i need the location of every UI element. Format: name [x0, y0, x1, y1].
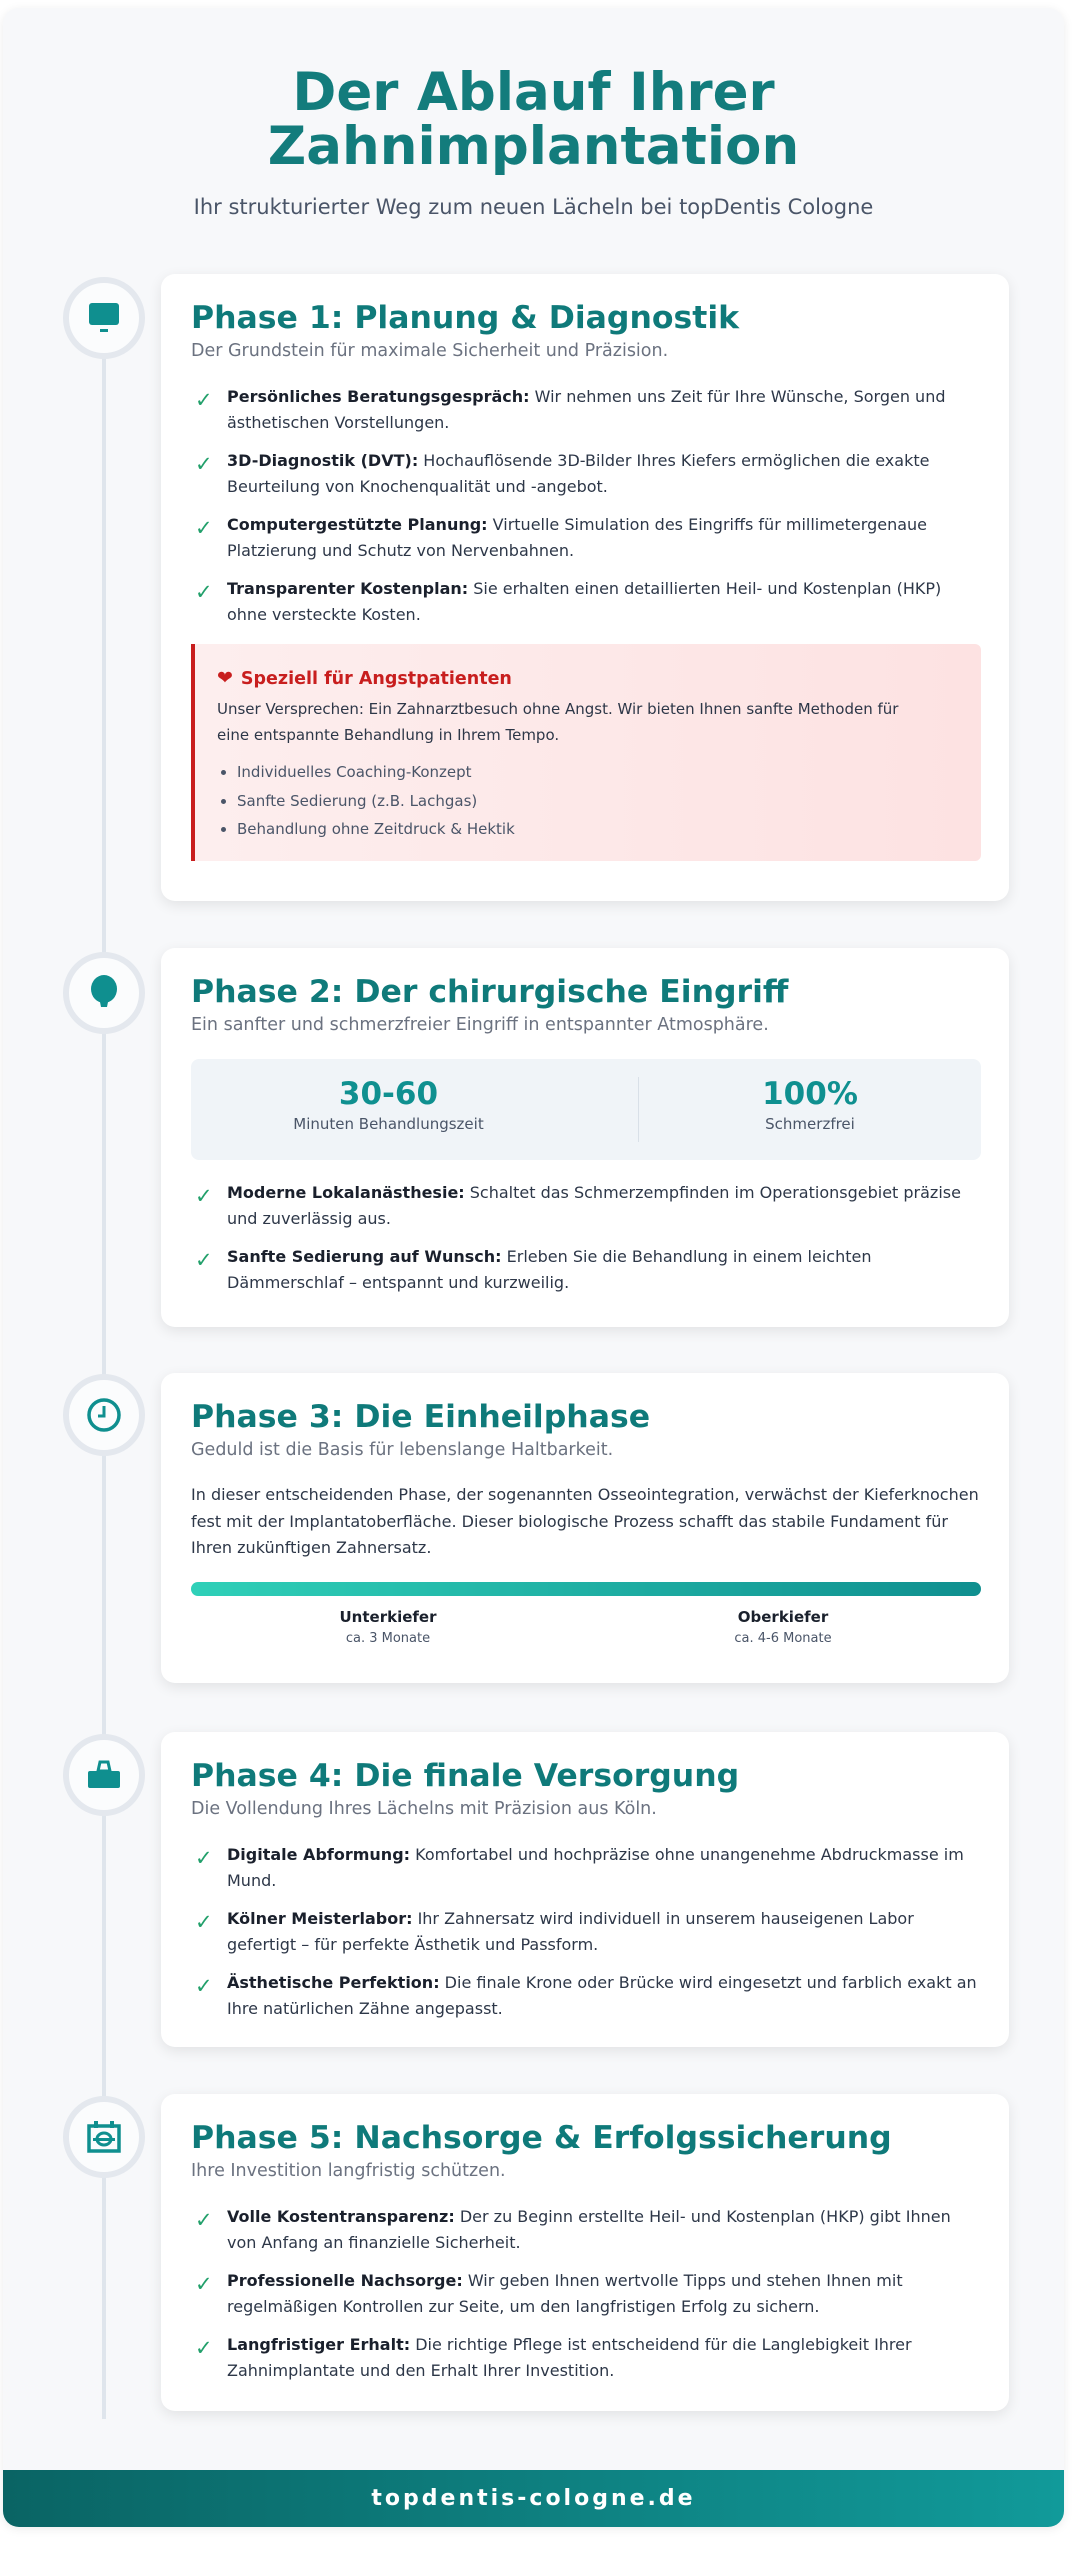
heading: Phase 2: Der chirurgische Eingriff: [191, 974, 788, 1010]
subheading: Die Vollendung Ihres Lächelns mit Präzision aus Köln.: [191, 1799, 657, 1819]
subheading: Ihre Investition langfristig schützen.: [191, 2161, 506, 2181]
subheading: Ein sanfter und schmerzfreier Eingriff in entspannter Atmosphäre.: [191, 1015, 769, 1035]
checklist: [198, 2207, 951, 2380]
callout text: eine entspannte Behandlung in Ihrem Tempo.: [217, 726, 559, 744]
icon: calendar (phase 5): [63, 2096, 145, 2178]
checklist: Digitale Abformung: Komfortabel und hochpräzise ohne unangenehme Abdruckmasse im Mund.: [227, 1845, 964, 1890]
icon: monitor (phase 1): [63, 277, 145, 359]
panel: phase 4: [161, 1732, 1009, 2047]
label: Oberkiefer: ca. 4-6 Monate: [734, 1630, 832, 1646]
checklist: Moderne Lokalanästhesie: Schaltet das Schmerzempfinden im Operationsgebiet präzise und zuverlässig aus.: [227, 1183, 961, 1228]
checklist: Volle Kostentransparenz: Der zu Beginn erstellte Heil- und Kostenplan (HKP) gibt Ihnen von Anfang an finanzielle Sicherheit.: [227, 2207, 951, 2252]
checklist: [198, 1183, 961, 1292]
footer: [3, 2470, 1064, 2527]
callout text: Unser Versprechen: Ein Zahnarztbesuch ohne Angst. Wir bieten Ihnen sanfte Methoden für: [217, 700, 898, 718]
footer: topdentis-cologne.de: [371, 2486, 696, 2511]
label: Oberkiefer: Oberkiefer: [738, 1608, 828, 1626]
stat: 30-60: [293, 1076, 484, 1133]
label: Unterkiefer: ca. 3 Monate: [346, 1630, 430, 1646]
icon: toolbox (phase 4): [63, 1734, 145, 1816]
heading: Phase 1: Planung & Diagnostik: [191, 300, 739, 336]
progress bar: [191, 1582, 981, 1596]
checklist: Transparenter Kostenplan: Sie erhalten einen detaillierten Heil- und Kostenplan (HKP) ohne versteckte Kosten.: [227, 579, 941, 624]
heading: Phase 5: Nachsorge & Erfolgssicherung: [191, 2120, 892, 2156]
label: Unterkiefer: [340, 1608, 436, 1646]
checklist: Sanfte Sedierung auf Wunsch: Erleben Sie die Behandlung in einem leichten Dämmerschlaf – entspannt und kurzweilig.: [227, 1247, 871, 1292]
icon: clock (phase 3): [63, 1374, 145, 1456]
icon: balloon (phase 2): [63, 952, 145, 1034]
callout list: Individuelles Coaching-Konzept: [237, 763, 472, 781]
checklist: Computergestützte Planung: Virtuelle Simulation des Eingriffs für millimetergenaue Platzierung und Schutz von Nervenbahnen.: [227, 515, 927, 560]
subheading: Geduld ist die Basis für lebenslange Haltbarkeit.: [191, 1440, 613, 1460]
title: [268, 62, 799, 177]
checklist: Kölner Meisterlabor: Ihr Zahnersatz wird individuell in unserem hauseigenen Labor gefertigt – für perfekte Ästhetik und Passform.: [227, 1909, 914, 1954]
heading: Phase 4: Die finale Versorgung: [191, 1758, 739, 1794]
stat: 100%: 100%: [762, 1076, 858, 1112]
callout heading with heart icon: ❤ Speziell für Angstpatienten: [217, 667, 512, 689]
title: Der Ablauf Ihrer: [292, 62, 775, 123]
stat: 100%: [762, 1076, 858, 1133]
checklist: Professionelle Nachsorge: Wir geben Ihnen wertvolle Tipps und stehen Ihnen mit regelmäßigen Kontrollen zur Seite, um den langfristigen Erfolg zu sichern.: [227, 2271, 903, 2316]
stats box: [191, 1059, 981, 1160]
panel: phase 3: [161, 1373, 1009, 1683]
subheading: Der Grundstein für maximale Sicherheit und Präzision.: [191, 341, 668, 361]
heading: Phase 3: Die Einheilphase: [191, 1399, 650, 1435]
panel: phase 1: [161, 274, 1009, 901]
panel: phase 2: [161, 948, 1009, 1327]
stat: 30-60: 30-60: [339, 1076, 438, 1112]
timeline line: [102, 282, 106, 2419]
title: Zahnimplantation: [268, 116, 799, 177]
subtitle: Ihr strukturierter Weg zum neuen Lächeln bei topDentis Cologne: [194, 195, 873, 219]
callout text: [217, 700, 898, 744]
stat: 30-60: Minuten Behandlungszeit: [293, 1115, 484, 1133]
checklist: Langfristiger Erhalt: Die richtige Pflege ist entscheidend für die Langlebigkeit Ihrer Zahnimplantate und den Erhalt Ihrer Investition.: [227, 2335, 912, 2380]
stat: 100%: Schmerzfrei: [765, 1115, 855, 1133]
checklist: [198, 1845, 977, 2018]
paragraph: In dieser entscheidenden Phase, der sogenannten Osseointegration, verwächst der Kieferknochen fest mit der Implantatoberfläche. Dieser biologische Prozess schafft das stabile Fundament für Ihren zukünftigen Zahnersatz.: [191, 1485, 979, 1557]
callout list: [221, 763, 515, 838]
checklist: Ästhetische Perfektion: Die finale Krone oder Brücke wird eingesetzt und farblich exakt an Ihre natürlichen Zähne angepasst.: [227, 1973, 977, 2018]
checklist: [198, 387, 945, 624]
label: Oberkiefer: [734, 1608, 832, 1646]
timeline labels: [340, 1608, 832, 1646]
panel: phase 5: [161, 2094, 1009, 2411]
label: Unterkiefer: Unterkiefer: [340, 1608, 436, 1626]
callout list: Behandlung ohne Zeitdruck & Hektik: [237, 820, 515, 838]
callout: Angstpatienten: [191, 644, 981, 861]
checklist: 3D-Diagnostik (DVT): Hochauflösende 3D-Bilder Ihres Kiefers ermöglichen die exakte Beurteilung von Knochenqualität und -angebot.: [227, 451, 929, 496]
checklist: Persönliches Beratungsgespräch: Wir nehmen uns Zeit für Ihre Wünsche, Sorgen und ästhetischen Vorstellungen.: [227, 387, 945, 432]
callout list: Sanfte Sedierung (z.B. Lachgas): [237, 792, 477, 810]
